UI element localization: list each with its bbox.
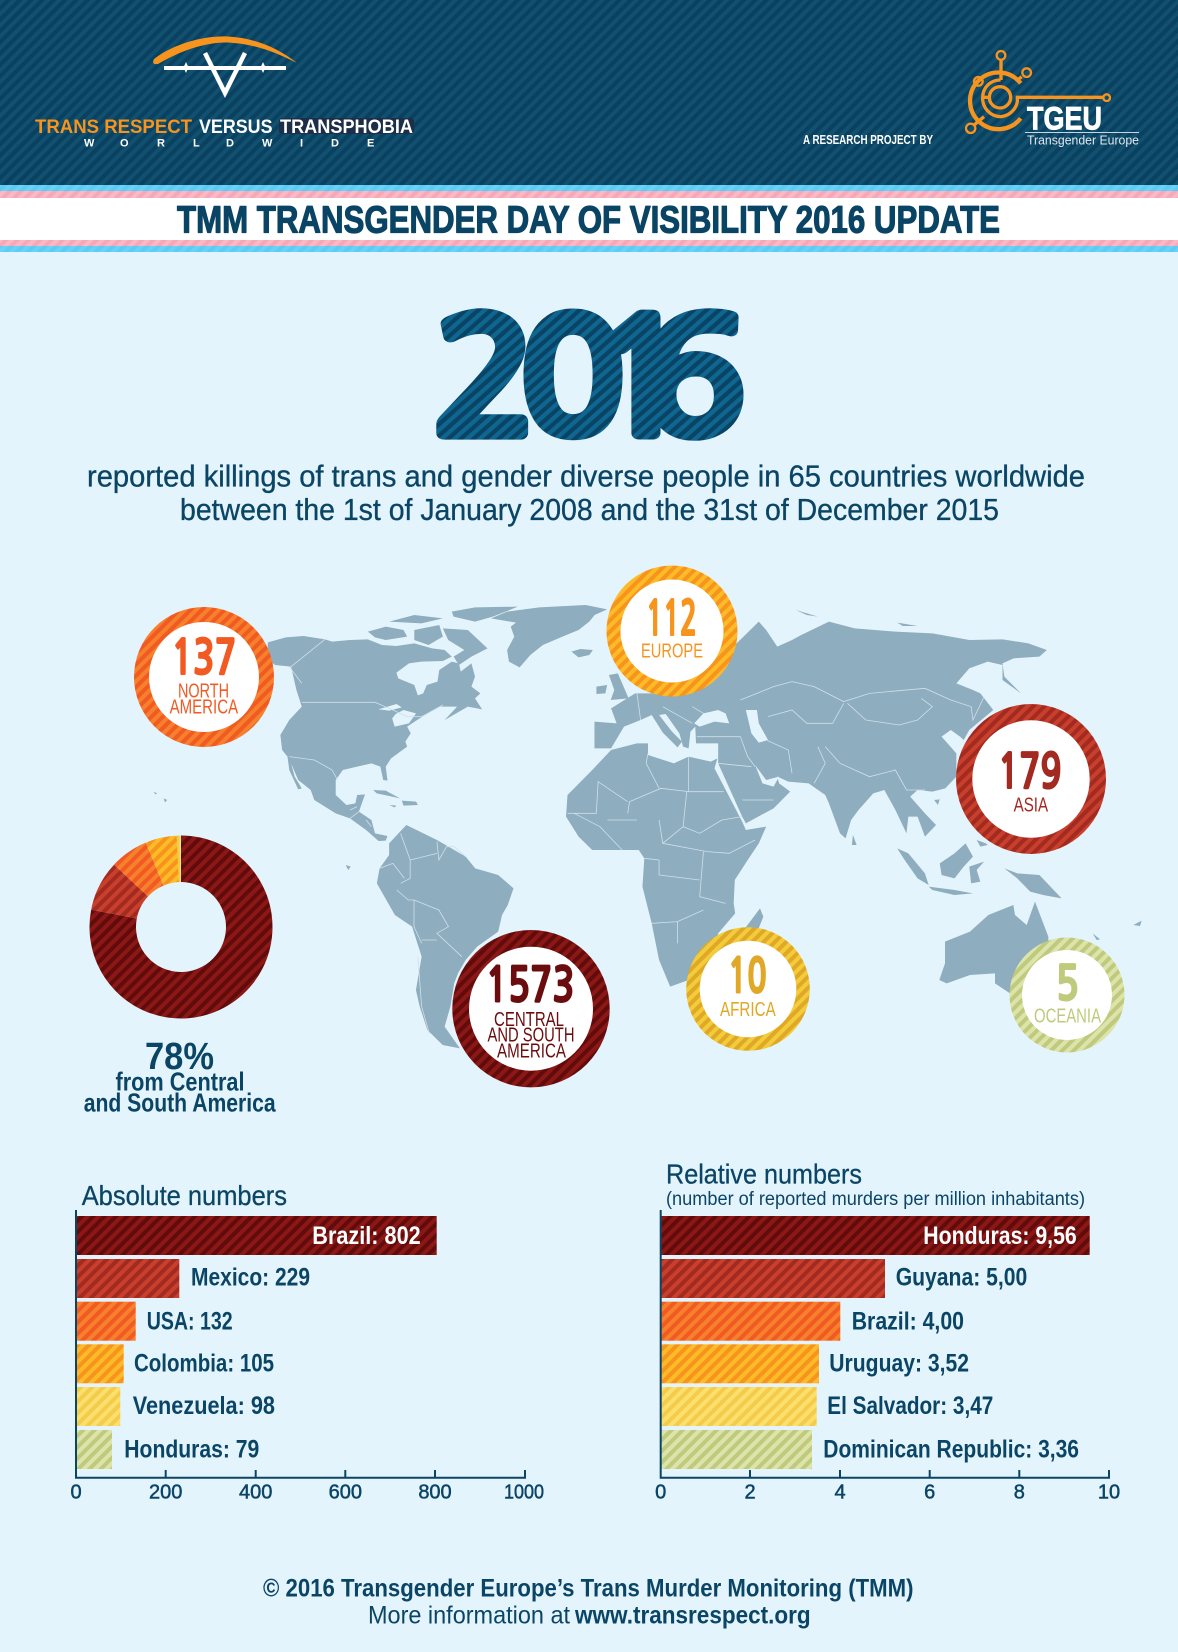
footer: © 2016 Transgender Europe’s Trans Murder Monitoring (TMM) [263, 1575, 914, 1603]
callout: Africa [686, 927, 810, 1051]
callout: Oceania: OCEANIA [1034, 1006, 1101, 1028]
callout: Asia: ASIA [1014, 795, 1049, 817]
donut caption [84, 1036, 276, 1118]
bar labels: Guyana: 5,00 [896, 1264, 1027, 1292]
axis labels: 4 [834, 1481, 846, 1503]
bar labels [823, 1222, 1079, 1463]
bar chart: absolute numbers [70, 1180, 544, 1503]
axes [76, 1210, 525, 1478]
axis labels: 1000 [504, 1481, 544, 1503]
chart heading: (number of reported murders per million inhabitants) [666, 1189, 1085, 1210]
logo: TGEU Transgender Europe [966, 51, 1139, 147]
axis labels: 0 [70, 1481, 82, 1503]
callout: Africa: AFRICA [720, 999, 776, 1021]
callout: Asia: 179 [998, 749, 1062, 796]
callout: Europe: EUROPE [641, 641, 703, 663]
axis labels: 200 [149, 1481, 182, 1503]
axes [661, 1210, 1109, 1478]
big number 2016: 2016 [431, 302, 747, 459]
bar labels [124, 1222, 421, 1463]
bar labels: Mexico: 229 [191, 1264, 310, 1292]
footer: www.transrespect.org [574, 1601, 811, 1629]
donut chart: share by region [89, 836, 272, 1018]
logo: Trans Respect versus Transphobia [35, 36, 414, 150]
chart heading: Relative numbers [666, 1158, 862, 1189]
header band [0, 0, 1178, 185]
bar labels: Venezuela: 98 [133, 1392, 275, 1420]
bar labels: Brazil: 4,00 [852, 1307, 964, 1335]
subtitle [87, 459, 1085, 527]
callout: Oceania [1010, 938, 1124, 1052]
callout: North America: NORTH [178, 681, 229, 703]
axis labels: 10 [1098, 1481, 1120, 1503]
donut caption: from Central [116, 1067, 244, 1097]
callout: North America: 137 [171, 635, 236, 682]
axis labels: 0 [655, 1481, 666, 1503]
bar chart: relative numbers [655, 1158, 1120, 1503]
chart heading: Absolute numbers [82, 1180, 287, 1211]
axis labels [70, 1481, 544, 1503]
bar labels: USA: 132 [147, 1307, 233, 1335]
world map [154, 605, 1142, 1048]
callout: Central and South America: AMERICA [497, 1040, 566, 1062]
callout: Central and South America: AND SOUTH [488, 1025, 574, 1047]
axis labels: 2 [744, 1481, 756, 1503]
axis labels: 8 [1014, 1481, 1025, 1503]
footer: More information at [368, 1601, 570, 1629]
callout: Central and South America: CENTRAL [494, 1009, 564, 1031]
axis labels: 800 [418, 1481, 452, 1503]
donut caption: 78% [145, 1036, 214, 1078]
donut caption: and South America [84, 1088, 276, 1118]
title: TMM TRANSGENDER DAY OF VISIBILITY 2016 UPDATE [177, 200, 1000, 242]
callout: North America: AMERICA [170, 696, 239, 718]
bar labels: Dominican Republic: 3,36 [823, 1435, 1079, 1463]
callout: Oceania: 5 [1056, 961, 1079, 1008]
logo: Trans Respect versus Transphobia: TRANS RESPECT [35, 117, 192, 138]
footer [263, 1575, 914, 1629]
bar labels: Brazil: 802 [312, 1222, 421, 1250]
callout: Central and South America [452, 930, 610, 1087]
axis labels: 400 [239, 1481, 272, 1503]
bar labels: Honduras: 79 [124, 1435, 259, 1463]
bar labels: Honduras: 9,56 [923, 1222, 1077, 1250]
callout: Africa: 10 [728, 954, 767, 1001]
axis labels [655, 1481, 1120, 1503]
callout: Europe: 112 [646, 596, 697, 643]
logo: Trans Respect versus Transphobia: TRANSPHOBIA [280, 117, 413, 138]
logo: TGEU Transgender Europe: TGEU [1027, 100, 1102, 136]
axis labels: 600 [329, 1481, 362, 1503]
callout: Central and South America: 1573 [486, 963, 575, 1010]
bars [661, 1216, 1090, 1469]
callout: Asia [956, 704, 1106, 854]
bar labels: El Salvador: 3,47 [827, 1392, 993, 1420]
chart heading [666, 1158, 1085, 1210]
subtitle: between the 1st of January 2008 and the 31st of December 2015 [180, 492, 999, 527]
subtitle: reported killings of trans and gender diverse people in 65 countries worldwide [87, 459, 1085, 494]
bar labels: Uruguay: 3,52 [829, 1349, 969, 1377]
research project credit: A RESEARCH PROJECT BY [803, 133, 934, 147]
title banner [0, 185, 1178, 252]
callout: Europe [606, 566, 738, 696]
bar labels: Colombia: 105 [134, 1349, 274, 1377]
logo: Trans Respect versus Transphobia: WORLDWIDE [84, 138, 374, 150]
bars [76, 1216, 437, 1469]
logo: TGEU Transgender Europe: Transgender Europe [1027, 133, 1139, 147]
logo: Trans Respect versus Transphobia: VERSUS [199, 117, 272, 138]
callout: North America [134, 607, 274, 747]
axis labels: 6 [924, 1481, 935, 1503]
